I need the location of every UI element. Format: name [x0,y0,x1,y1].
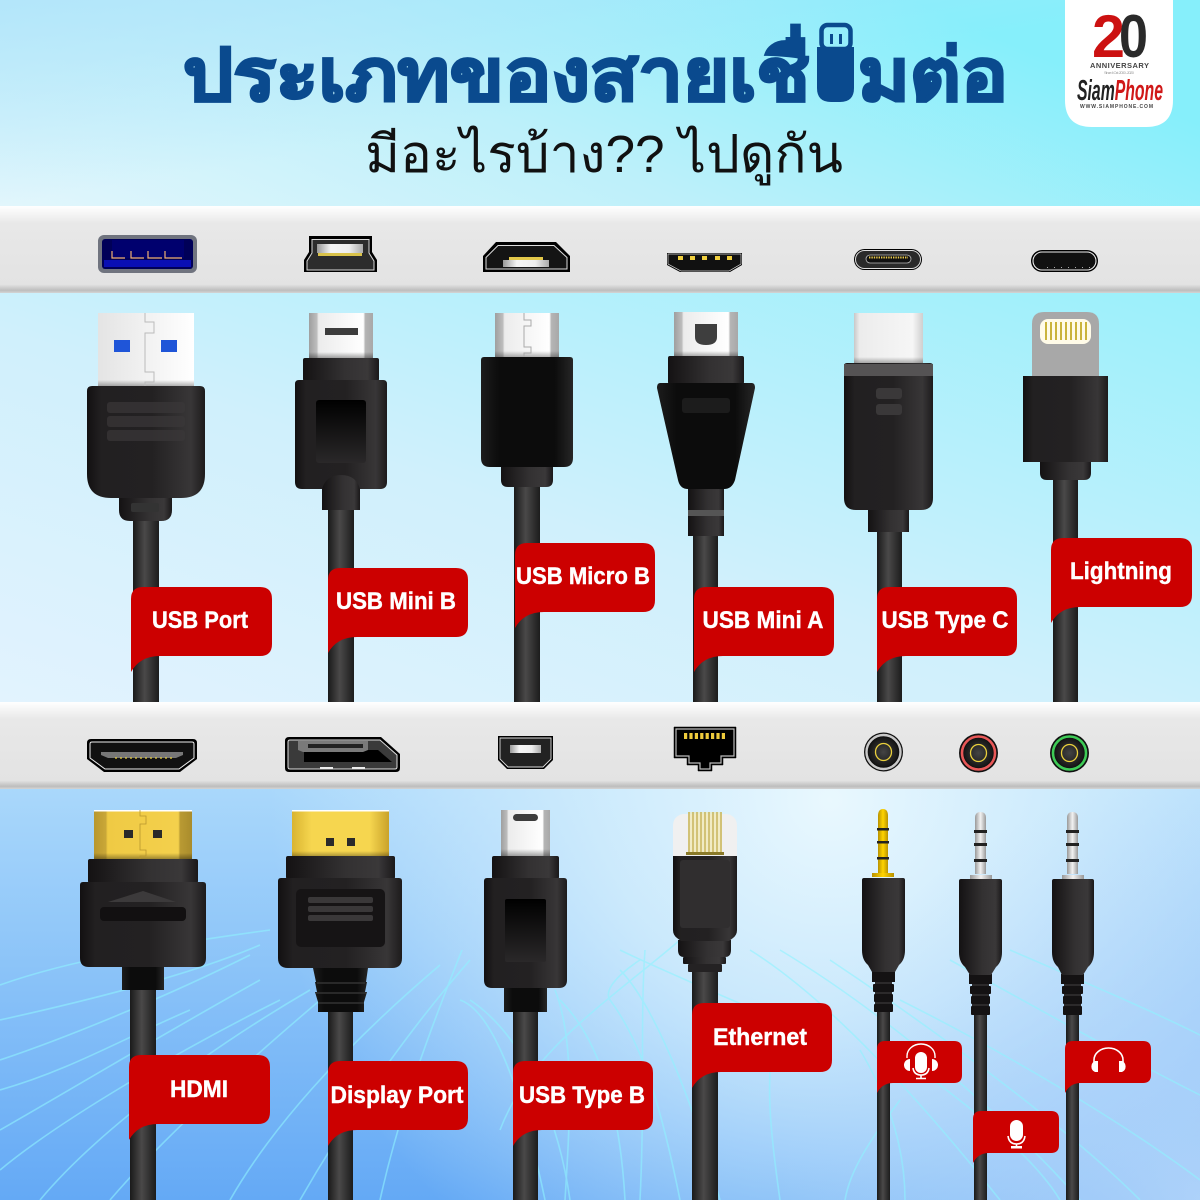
icon: USB micro B port [483,242,570,272]
label: USB Micro B: USB Micro B [516,563,650,590]
plug: Ethernet [673,812,737,1200]
logo: SiamPhone 20 anniversary: SiamPhone [1077,75,1163,107]
plug: audio jack silver mic [959,812,1002,1200]
icon: USB port [98,235,197,273]
icon: green audio jack [1050,734,1089,772]
label: Ethernet: Ethernet [713,1024,807,1051]
icon: USB mini A port [667,253,742,272]
icon: USB mini B port [304,236,377,272]
label: USB Micro B [515,543,655,628]
label: USB Type B [513,1061,653,1146]
label: Lightning: Lightning [1070,558,1172,585]
logo: SiamPhone 20 anniversary: ANNIVERSARY [1090,61,1149,70]
label: HDMI [129,1055,270,1140]
logo: SiamPhone 20 anniversary: WWW.SIAMPHONE.COM [1080,104,1153,110]
icon: black audio jack [864,732,903,772]
title: มต่อ [858,36,1008,116]
label: Ethernet [692,1003,832,1088]
label: USB Type C: USB Type C [882,607,1008,634]
label: HDMI: HDMI [170,1076,228,1103]
logo: SiamPhone 20 anniversary: 2 [1092,3,1125,70]
label: USB Mini B [328,568,468,653]
label: USB Mini B: USB Mini B [336,588,456,615]
title [183,24,1008,116]
plug: USB Port [87,313,205,702]
label: USB Mini A: USB Mini A [702,607,824,634]
icon: HDMI port [87,739,197,772]
icon: usb drive in title [817,25,854,102]
title: ประเภทของสายเชื่ [183,24,810,116]
port bar: top [0,206,1200,293]
label: USB Port: USB Port [152,607,248,634]
label: Display Port: Display Port [330,1082,464,1109]
label: headset icon tag [877,1041,962,1093]
plug: Display Port [278,810,402,1200]
logo: SiamPhone 20 anniversary [1065,0,1173,127]
plug: Lightning [1023,312,1108,702]
plug: USB Mini B [295,313,387,702]
logo: SiamPhone 20 anniversary: 0 [1119,3,1148,70]
icon: DisplayPort port [285,737,400,772]
label: Lightning [1051,538,1192,623]
label: USB Type B: USB Type B [519,1082,645,1109]
plug: USB Type C [844,313,933,702]
label: USB Mini A [694,587,834,672]
plug: audio jack silver headphone [1052,812,1094,1200]
icon: Ethernet port [674,727,736,771]
label: USB Port [131,587,272,672]
icon: mini DisplayPort port [498,736,553,769]
icon: USB type C port [854,249,922,270]
plug: HDMI [80,810,206,1200]
port bar: bottom [0,702,1200,789]
plug: audio jack gold [862,809,905,1200]
logo: SiamPhone 20 anniversary: Since 4 Oct. 2000 - 2020 [1104,70,1135,75]
icon: red audio jack [959,734,998,772]
label: headphones icon tag [1065,1041,1151,1093]
plug: USB Type B [484,810,567,1200]
subtitle: มีอะไรบ้าง?? ไปดูกัน [365,125,843,186]
label: microphone icon tag [973,1111,1059,1163]
label: Display Port [328,1061,468,1146]
plug: USB Micro B [481,313,573,702]
icon: Lightning port [1031,250,1098,272]
label: USB Type C [877,587,1017,672]
plug: USB Mini A [657,312,755,702]
